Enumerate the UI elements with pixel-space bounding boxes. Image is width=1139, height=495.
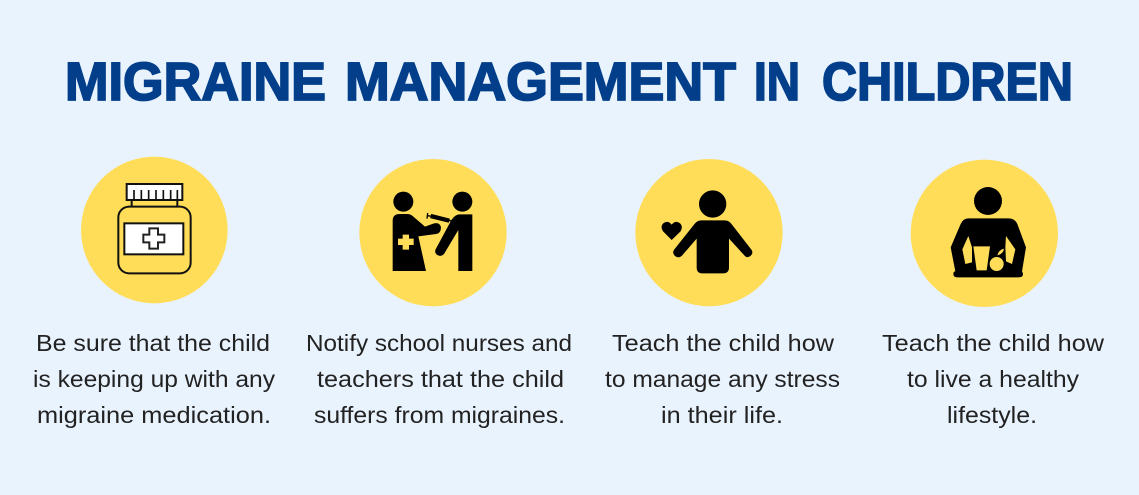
text: medication: is keeping up with any bbox=[33, 366, 275, 392]
text: stress: in their life. bbox=[661, 402, 783, 428]
title: MIGRAINE bbox=[65, 52, 326, 112]
title: IN bbox=[754, 52, 800, 112]
text: school nurses bbox=[306, 330, 572, 428]
text: healthy lifestyle bbox=[882, 330, 1105, 428]
text: school nurses: teachers that the child bbox=[317, 366, 564, 392]
panel: school nurses bbox=[306, 159, 572, 428]
text: stress bbox=[605, 330, 840, 428]
title bbox=[65, 52, 1073, 112]
panel: medication bbox=[33, 157, 275, 428]
icon: medicine bottle bbox=[81, 157, 228, 303]
text: medication bbox=[33, 330, 275, 428]
text: healthy lifestyle: to live a healthy bbox=[907, 366, 1079, 392]
text: healthy lifestyle: Teach the child how bbox=[882, 330, 1105, 356]
text: medication: migraine medication. bbox=[37, 402, 271, 428]
icon: person with food and drink bbox=[911, 160, 1058, 307]
text: stress: Teach the child how bbox=[612, 330, 835, 356]
title: CHILDREN bbox=[822, 52, 1073, 112]
text: stress: to manage any stress bbox=[605, 366, 840, 392]
panel: healthy lifestyle bbox=[882, 160, 1105, 428]
icon: nurse giving injection bbox=[359, 159, 507, 306]
text: medication: Be sure that the child bbox=[36, 330, 270, 356]
text: healthy lifestyle: lifestyle. bbox=[947, 402, 1037, 428]
text: school nurses: suffers from migraines. bbox=[314, 402, 565, 428]
title: MANAGEMENT bbox=[345, 52, 736, 112]
panel: stress bbox=[605, 159, 840, 428]
icon: person with heart bbox=[635, 159, 783, 306]
text: school nurses: Notify school nurses and bbox=[306, 330, 572, 356]
